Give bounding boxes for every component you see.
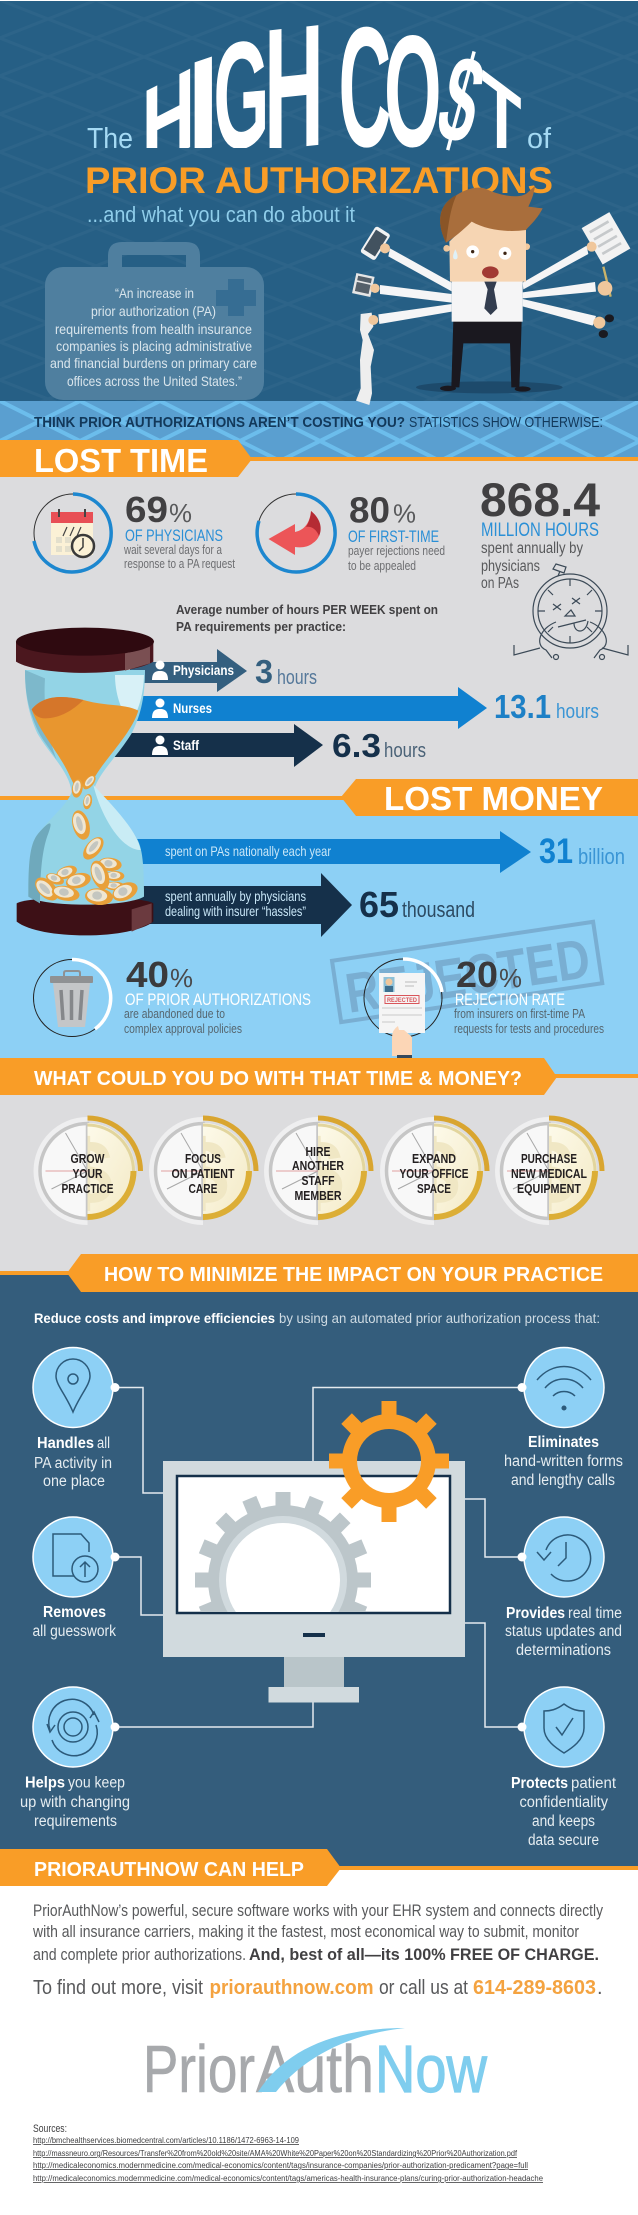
arrow: 31 billion: spent on PAs nationally each year [165, 843, 331, 859]
hourglass with falling coins [16, 628, 154, 935]
gauge: hire another staff member: STAFF [302, 1174, 335, 1188]
connector lines [115, 1388, 522, 1727]
stat: 80 percent of first-time rejections: 80 [349, 490, 390, 530]
stat: 80 percent of first-time rejections: % [393, 498, 416, 528]
gauge: purchase new medical equipment: PURCHASE [521, 1152, 577, 1166]
icon: grey gear [195, 1492, 371, 1612]
icon: rejected form held by hand [364, 959, 442, 1058]
stat: 20 percent rejection rate: REJECTION RATE [455, 991, 565, 1009]
strip heading: THINK PRIOR AUTHORIZATIONS AREN’T COSTING YOU? [34, 414, 405, 431]
arrow: physicians 3 hours [130, 649, 317, 692]
feature: protects patient confidentiality: patient [571, 1775, 617, 1792]
logo: priorauthnow: Now [375, 2032, 488, 2107]
feature: handles all pa activity [33, 1348, 120, 1490]
feature: eliminates hand-written forms: Eliminates [528, 1434, 599, 1451]
icon: trash can [34, 959, 111, 1036]
intro sentence [34, 1310, 600, 1326]
logo: priorauthnow [143, 2028, 488, 2107]
gauge: hire another staff member: MEMBER [294, 1189, 342, 1203]
title arch: HIGH COST: H [142, 43, 195, 197]
stat: 868.4 million hours: on PAs [481, 575, 519, 592]
arrow: 65 thousand: dealing with insurer “hassles” [165, 903, 306, 919]
gauge: expand your office space [380, 1117, 487, 1225]
arrow: nurses 13.1 hours: hours [556, 701, 599, 723]
feature: helps keep up with requirements [20, 1687, 130, 1830]
body paragraph: And, best of all—its 100% FREE OF CHARGE. [249, 1945, 599, 1964]
gauge: hire another staff member: ANOTHER [292, 1159, 344, 1173]
sources [33, 2123, 544, 2183]
feature: helps keep up with requirements: up with changing [20, 1794, 130, 1811]
icon: wifi [518, 1348, 604, 1428]
gauge: purchase new medical equipment: NEW MEDICAL [511, 1167, 587, 1181]
feature: handles all pa activity: one place [43, 1473, 105, 1490]
illustration: stressed doctor with many arms [352, 186, 630, 405]
feature: removes guesswork: Removes [43, 1604, 106, 1621]
title word: of: of [527, 123, 552, 155]
arrow: staff 6.3 hours [100, 724, 426, 767]
stat: 80 percent of first-time rejections: OF FIRST-TIME [348, 528, 439, 546]
call to action: or call us at [379, 1977, 468, 1999]
feature: provides real time status: real time [568, 1605, 622, 1622]
banner: what could you do: WHAT COULD YOU DO WITH THAT TIME & MONEY? [34, 1068, 522, 1090]
gauge: expand your office space: EXPAND [412, 1152, 456, 1166]
body paragraph: and complete prior authorizations. [33, 1946, 246, 1964]
arrow: 65 thousand: 65 [359, 884, 399, 925]
arrow: 31 billion [120, 831, 625, 873]
banner: what could you do [0, 1058, 557, 1095]
call to action [33, 1977, 603, 1999]
icon: red return arrow [257, 494, 335, 572]
title arch: HIGH COST: G [213, 8, 269, 183]
sources: Sources: [33, 2123, 67, 2135]
stat: 40 percent abandoned [34, 954, 311, 1036]
feature: eliminates hand-written forms: hand-written forms [504, 1453, 623, 1470]
call to action: To find out more, visit [33, 1977, 203, 1999]
stat: 20 percent rejection rate: 20 [456, 954, 498, 995]
feature: helps keep up with requirements: requirements [34, 1813, 117, 1830]
stat: 69 percent of physicians [34, 489, 235, 572]
arrow: physicians 3 hours: Physicians [173, 662, 234, 678]
feature: protects patient confidentiality: Protects [511, 1775, 568, 1792]
quote text: companies is placing administrative [56, 338, 252, 354]
title word: The: The [87, 123, 133, 155]
sources: http://medicaleconomics.modernmedicine.com/medical-economics/content/tags/insurance-companies/prior-authorization-predicament?page=full [33, 2161, 528, 2170]
gauge: expand your office space: SPACE [417, 1182, 451, 1196]
quote text: “An increase in [115, 285, 194, 301]
feature: helps keep up with requirements: you keep [68, 1774, 125, 1792]
arrow: staff 6.3 hours: 6.3 [332, 727, 381, 764]
banner: how to minimize [67, 1254, 638, 1292]
arrow: physicians 3 hours: 3 [255, 653, 273, 690]
gauge: grow your practice: PRACTICE [62, 1182, 114, 1196]
stat: 80 percent of first-time rejections [257, 490, 445, 573]
title arch: HIGH COST: O [384, 4, 442, 181]
logo: priorauthnow: Auth [256, 2032, 374, 2107]
gauge: grow your practice: YOUR [72, 1167, 102, 1181]
intro sentence: by using an automated prior authorization process that: [279, 1310, 600, 1326]
header background [0, 0, 638, 401]
chart heading: average hours per week: PA requirements per practice: [176, 619, 346, 634]
sources: http://bmchealthservices.biomedcentral.com/articles/10.1186/1472-6963-14-109 [33, 2136, 300, 2145]
gauge: focus on patient care: CARE [188, 1182, 218, 1196]
arrow: 65 thousand: spent annually by physicians [165, 888, 306, 904]
gauge: hire another staff member [264, 1117, 371, 1225]
stat: 80 percent of first-time rejections: to be appealed [348, 559, 416, 573]
stat: 69 percent of physicians: OF PHYSICIANS [125, 527, 223, 545]
feature: provides real time status: status updates and [505, 1623, 622, 1640]
arrow: staff 6.3 hours: hours [384, 740, 426, 762]
chart heading: average hours per week: Average number of hours PER WEEK spent on [176, 602, 438, 617]
gauge: hire another staff member: HIRE [306, 1145, 330, 1159]
feature: eliminates hand-written forms: and lengthy calls [511, 1472, 615, 1489]
quote text: prior authorization (PA) [91, 303, 216, 319]
stat: 20 percent rejection rate: requests for tests and procedures [454, 1022, 604, 1036]
arrow: physicians 3 hours: hours [277, 667, 317, 689]
feature: protects patient confidentiality: data secure [528, 1832, 599, 1849]
icon: document upload [33, 1517, 120, 1597]
stat: 69 percent of physicians: 69 [125, 489, 168, 530]
stat: 20 percent rejection rate: % [499, 963, 522, 993]
stat: 868.4 million hours: spent annually by [481, 540, 583, 557]
banner: lost money: LOST MONEY [384, 780, 603, 817]
gauge: focus on patient care: ON PATIENT [172, 1167, 235, 1181]
gauge: grow your practice: GROW [70, 1152, 105, 1166]
stat: 40 percent abandoned: are abandoned due to [124, 1007, 225, 1021]
feature: protects patient confidentiality: confidentiality [520, 1794, 608, 1811]
gauge: expand your office space: YOUR OFFICE [400, 1167, 468, 1181]
icon: shield with check [518, 1687, 604, 1767]
feature: helps keep up with requirements: Helps [25, 1774, 65, 1792]
icon: knocked-out alarm clock [514, 564, 628, 660]
stat: 868.4 million hours: 868.4 [480, 473, 600, 526]
quote text: requirements from health insurance [55, 321, 252, 337]
banner: priorauthnow can help [0, 1849, 341, 1886]
feature: handles all pa activity: all [97, 1435, 110, 1452]
chart heading: average hours per week [176, 602, 438, 634]
stat: 20 percent rejection rate: from insurers on first-time PA [454, 1007, 586, 1021]
banner: lost time: LOST TIME [34, 442, 208, 479]
icon: rejected form held by hand: REJECTED [387, 997, 417, 1004]
title arch: HIGH COST: T [482, 49, 521, 189]
gauge: purchase new medical equipment: EQUIPMENT [517, 1182, 581, 1196]
gauge: grow your practice [34, 1117, 140, 1225]
stat: 80 percent of first-time rejections: payer rejections need [348, 544, 445, 558]
banner: lost time [0, 440, 252, 479]
stat: 40 percent abandoned: % [170, 963, 193, 993]
illustration: monitor with gears [163, 1401, 465, 1702]
intro sentence: Reduce costs and improve efficiencies [34, 1310, 275, 1326]
quote text [50, 285, 257, 389]
call to action: . [597, 1977, 603, 1999]
gauge: focus on patient care: FOCUS [185, 1152, 221, 1166]
subtitle: ...and what you can do about it [87, 202, 355, 227]
feature: protects patient confidentiality [511, 1687, 617, 1849]
icon: medical briefcase [45, 242, 264, 400]
arrow: 31 billion: 31 [539, 832, 573, 871]
icon: nurse [152, 698, 168, 718]
stat: 69 percent of physicians: response to a PA request [124, 557, 235, 571]
stat: 40 percent abandoned: complex approval policies [124, 1022, 242, 1036]
quote text: offices across the United States.” [67, 373, 242, 389]
arrow: nurses 13.1 hours: Nurses [173, 700, 212, 716]
quote text: and financial burdens on primary care [50, 355, 257, 371]
banner: priorauthnow can help: PRIORAUTHNOW CAN HELP [34, 1859, 304, 1881]
arrow: staff 6.3 hours: Staff [173, 737, 199, 753]
sources: http://massneuro.org/Resources/Transfer%20from%20old%20site/AMA%20White%20Paper%20on%20Standardizing%20Prior%20Authorization.pdf [33, 2149, 518, 2158]
stat: 868.4 million hours: MILLION HOURS [481, 519, 599, 541]
icon: refresh cycle [33, 1687, 120, 1767]
title line: prior authorizations: PRIOR AUTHORIZATIONS [85, 160, 553, 201]
feature: handles all pa activity: Handles [37, 1435, 94, 1452]
title arch: HIGH COST: $ [425, 29, 496, 172]
strip heading: STATISTICS SHOW OTHERWISE: [409, 414, 603, 431]
title [88, 25, 552, 226]
arrow: 65 thousand: thousand [402, 897, 475, 922]
icon: calendar with clock [34, 494, 112, 572]
arrow: nurses 13.1 hours [120, 687, 599, 729]
feature: eliminates hand-written forms [504, 1348, 623, 1489]
stat: 69 percent of physicians: % [169, 498, 192, 528]
feature: removes guesswork: all guesswork [32, 1623, 116, 1640]
feature: provides real time status: Provides [506, 1605, 565, 1622]
stat: 69 percent of physicians: wait several days for a [123, 543, 222, 557]
body paragraph [32, 1902, 604, 1964]
stat: 20 percent rejection rate [364, 954, 604, 1058]
arrow: 65 thousand [120, 873, 475, 937]
gauge: focus on patient care [149, 1117, 256, 1225]
title arch: HIGH COST: I [187, 26, 220, 185]
feature: protects patient confidentiality: and keeps [532, 1813, 595, 1830]
banner: how to minimize: HOW TO MINIMIZE THE IMPACT ON YOUR PRACTICE [104, 1264, 603, 1286]
arrow: nurses 13.1 hours: 13.1 [494, 688, 551, 725]
feature: provides real time status: determinations [516, 1642, 611, 1659]
call to action: priorauthnow.com [210, 1977, 374, 1999]
icon: clock with return arrow [518, 1517, 604, 1597]
title arch: HIGH COST [146, 25, 521, 150]
icon: map pin [33, 1348, 120, 1428]
icon: orange gear [329, 1401, 449, 1522]
call to action: 614-289-8603 [473, 1977, 596, 1999]
stat: 868.4 million hours: physicians [481, 558, 540, 575]
logo: priorauthnow: Prior [143, 2032, 255, 2107]
panel: briefcase quote [45, 242, 264, 400]
sources: http://medicaleconomics.modernmedicine.com/medical-economics/content/tags/americas-health-insurance-plans/curing-prior-authorization-headache [33, 2174, 544, 2183]
feature: removes guesswork [32, 1517, 120, 1640]
stamp: rejected: REJECTED [341, 926, 594, 1025]
stat: 40 percent abandoned: OF PRIOR AUTHORIZATIONS [125, 991, 311, 1009]
icon: physician [152, 660, 168, 680]
feature: handles all pa activity: PA activity in [34, 1455, 112, 1472]
gauge: purchase new medical equipment [495, 1117, 602, 1225]
feature: provides real time status [505, 1517, 622, 1659]
stat: 868.4 million hours [480, 473, 628, 660]
stat: 40 percent abandoned: 40 [126, 954, 169, 995]
arrow: 31 billion: billion [578, 844, 625, 869]
icon: staff [152, 736, 168, 755]
